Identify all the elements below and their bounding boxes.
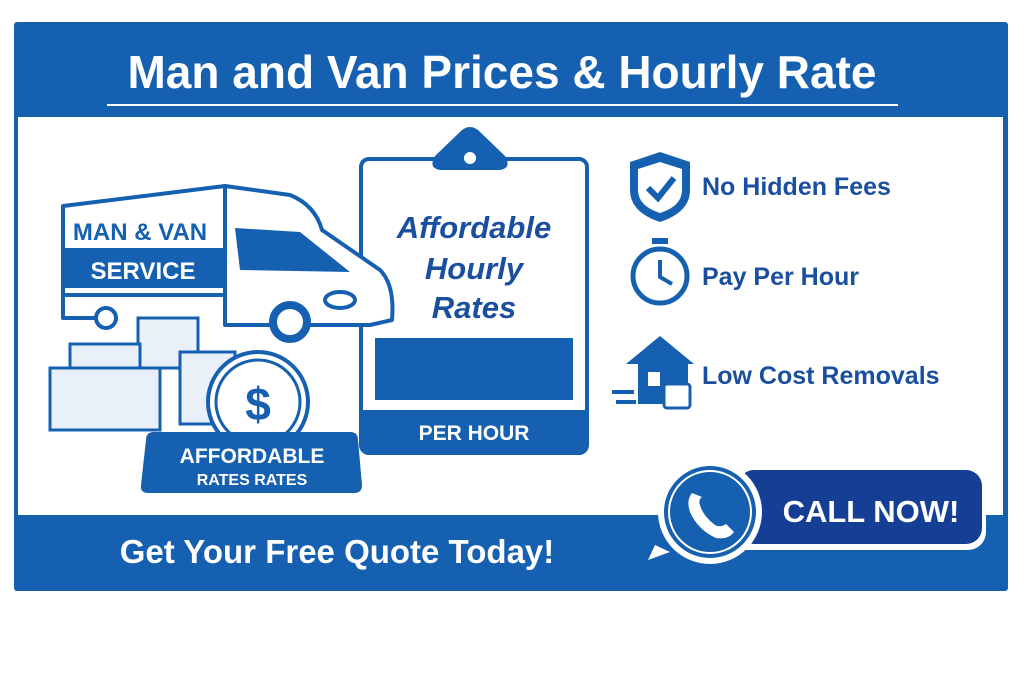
icon: dollar clock: $ <box>245 378 271 430</box>
price tag: Affordable <box>396 210 551 245</box>
price tag: Hourly <box>425 251 525 286</box>
van text: SERVICE <box>91 258 195 285</box>
icon: van <box>63 186 392 339</box>
feature: low cost removals <box>612 336 940 408</box>
title: Man and Van Prices & Hourly Rate <box>127 46 877 98</box>
price tag: PER HOUR <box>419 422 529 445</box>
price tag <box>361 127 587 453</box>
van text: MAN & VAN <box>73 219 207 246</box>
badge: affordable rates: RATES RATES <box>197 472 308 489</box>
feature: no hidden fees: No Hidden Fees <box>702 173 891 201</box>
feature: low cost removals: Low Cost Removals <box>702 362 940 390</box>
call now button <box>648 460 986 564</box>
footer text: Get Your Free Quote Today! <box>120 533 554 570</box>
feature: no hidden fees <box>630 152 891 222</box>
feature: pay per hour <box>633 238 859 303</box>
call now button: CALL NOW! <box>783 494 959 529</box>
badge: affordable rates <box>141 432 362 493</box>
price tag: Rates <box>432 290 516 325</box>
icon: boxes <box>50 318 235 430</box>
icon: dollar clock <box>208 352 308 452</box>
feature: pay per hour: Pay Per Hour <box>702 263 859 291</box>
van text <box>73 219 207 285</box>
badge: affordable rates: AFFORDABLE <box>180 445 324 468</box>
